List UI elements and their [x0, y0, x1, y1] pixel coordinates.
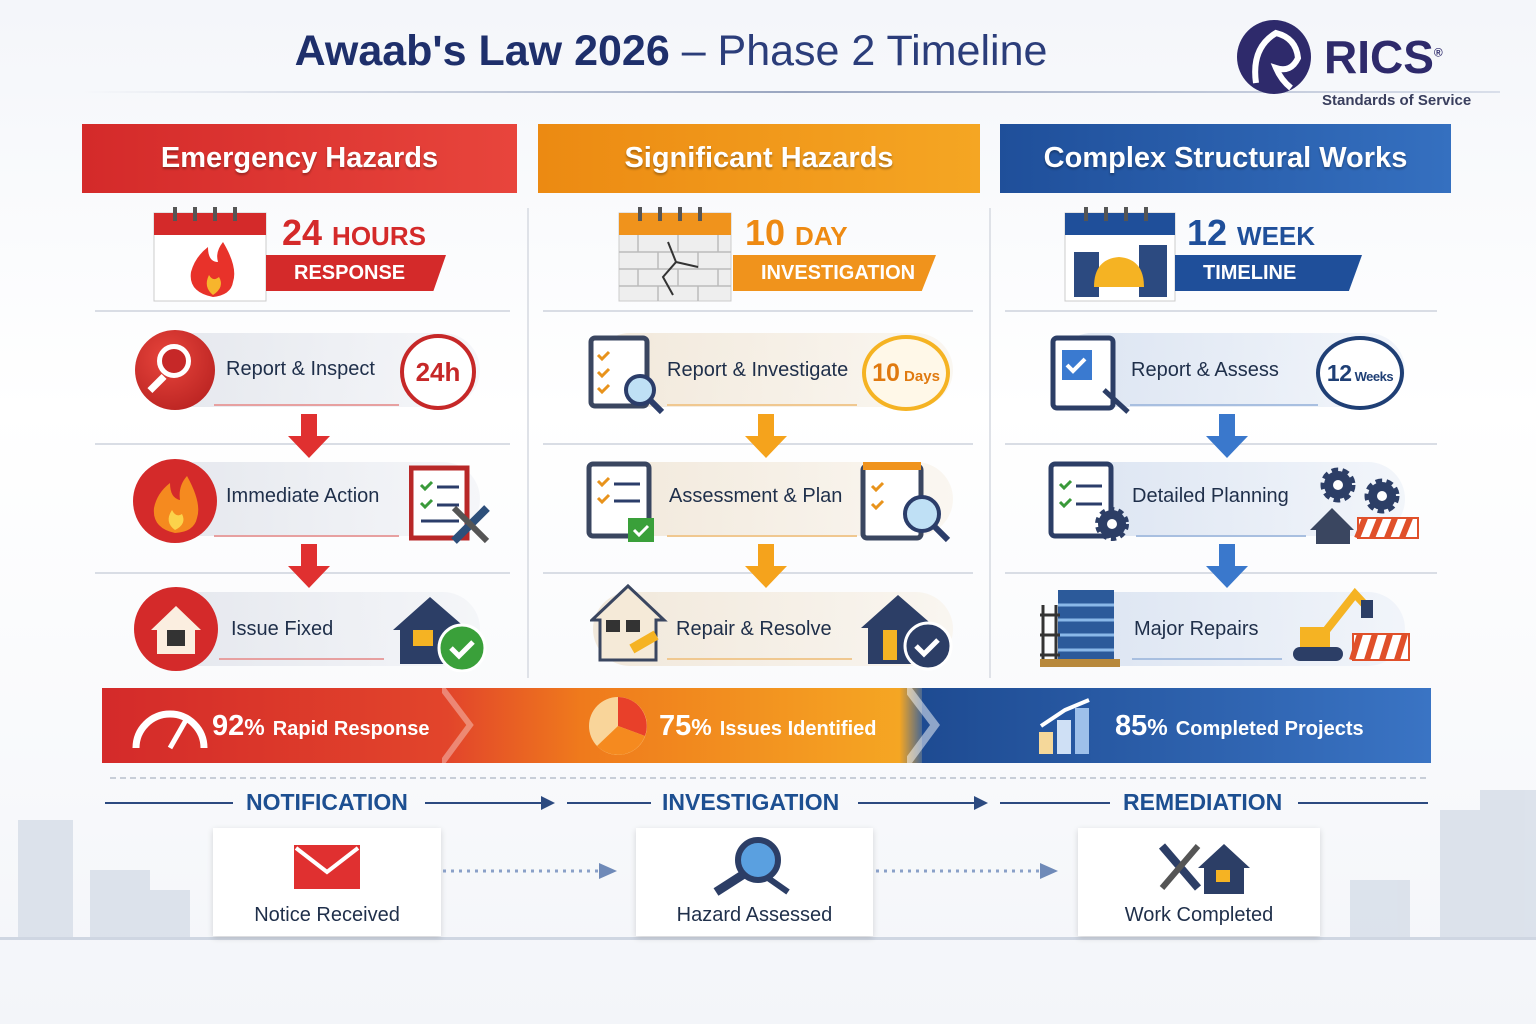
- panel: significant: 10 DAY: [745, 212, 848, 253]
- panel: significant: Assessment & Plan: [669, 485, 842, 507]
- box: notice received: Notice Received: [254, 904, 400, 926]
- text: REMEDIATION: [1123, 789, 1282, 815]
- icon: magnifier circle: [135, 330, 215, 410]
- icon: 10 days clock: [862, 335, 950, 411]
- logo: RICS: RICS®: [1324, 31, 1443, 83]
- panel: significant: INVESTIGATION: [761, 262, 915, 284]
- panel: complex: 12 WEEK: [1187, 212, 1315, 253]
- icon: excavator: [1293, 588, 1410, 661]
- panel: emergency: [133, 207, 490, 671]
- panel: complex: Detailed Planning: [1132, 485, 1289, 507]
- icon: 24h clock: 24h: [416, 357, 460, 387]
- icon: 12 weeks clock: 12 Weeks: [1327, 360, 1393, 386]
- text: NOTIFICATION: [246, 789, 408, 815]
- icon: envelope: [294, 845, 360, 889]
- background skyline: [18, 790, 1536, 937]
- panel: complex: Report & Assess: [1131, 359, 1279, 381]
- icon: 24h clock: [400, 334, 476, 410]
- stat: completed projects: [1039, 698, 1364, 754]
- box: work completed: Work Completed: [1125, 904, 1273, 926]
- stat: completed projects: 85% Completed Projects: [1115, 710, 1364, 742]
- icon: building scaffold: [1040, 590, 1120, 667]
- icon: house circle: [134, 587, 218, 671]
- panel: complex: [1040, 207, 1419, 667]
- icon: 12 weeks clock: [1316, 336, 1404, 410]
- icon: house check: [393, 597, 484, 670]
- arrow: [288, 414, 330, 458]
- icon: calendar crack: [618, 207, 732, 302]
- icon: calendar building: [1064, 207, 1176, 302]
- stats band: [102, 688, 1431, 763]
- panel: emergency: Issue Fixed: [231, 618, 333, 640]
- icon: 10 days clock: 10 Days: [872, 359, 940, 387]
- icon: clipboard gear: [1048, 462, 1129, 541]
- icon: calendar fire: [154, 207, 266, 302]
- column headers: Emergency Hazards: [161, 142, 438, 174]
- logo: RICS: [1237, 20, 1471, 109]
- icon: fire circle: [133, 459, 217, 543]
- box: hazard assessed: Hazard Assessed: [677, 904, 832, 926]
- column headers: [82, 124, 517, 193]
- icon: gears & barrier: [1310, 468, 1419, 544]
- panel: significant: Repair & Resolve: [676, 618, 832, 640]
- panel: complex: TIMELINE: [1203, 262, 1296, 284]
- icon: clipboard check: [586, 462, 654, 542]
- icon: tools house: [1159, 843, 1250, 894]
- box: notice received: [213, 828, 441, 936]
- stat: rapid response: 92% Rapid Response: [212, 710, 429, 742]
- icon: house repair: [590, 584, 668, 662]
- stage labels with arrows: [105, 802, 233, 804]
- text: INVESTIGATION: [662, 789, 839, 815]
- icon: magnifier: [714, 837, 790, 896]
- stat: issues identified: 75% Issues Identified: [659, 710, 876, 742]
- logo: RICS: Standards of Service: [1322, 92, 1471, 109]
- stat: issues identified: [589, 697, 876, 755]
- icon: clipboard blue: [1050, 336, 1130, 414]
- icon: clipboard magnifier: [588, 336, 664, 414]
- panel: significant: [586, 207, 953, 668]
- box: work completed: [1078, 828, 1320, 936]
- text: Complex Structural Works: [1044, 142, 1407, 174]
- panel: emergency: Immediate Action: [226, 485, 379, 507]
- panel: emergency: RESPONSE: [294, 262, 405, 284]
- text: Significant Hazards: [624, 142, 894, 174]
- panel: significant: Report & Investigate: [667, 359, 848, 381]
- icon: clipboard magnifier 2: [860, 462, 950, 542]
- title: Awaab's Law 2026 – Phase 2 Timeline: [295, 27, 1047, 75]
- panel: emergency: 24 HOURS: [282, 212, 426, 253]
- icon: house check: [861, 595, 952, 668]
- panel: emergency: Report & Inspect: [226, 358, 375, 380]
- panel: complex: Major Repairs: [1134, 618, 1258, 640]
- box: hazard assessed: [636, 828, 873, 936]
- stat: rapid response: [132, 710, 429, 750]
- icon: clipboard tools: [409, 466, 490, 544]
